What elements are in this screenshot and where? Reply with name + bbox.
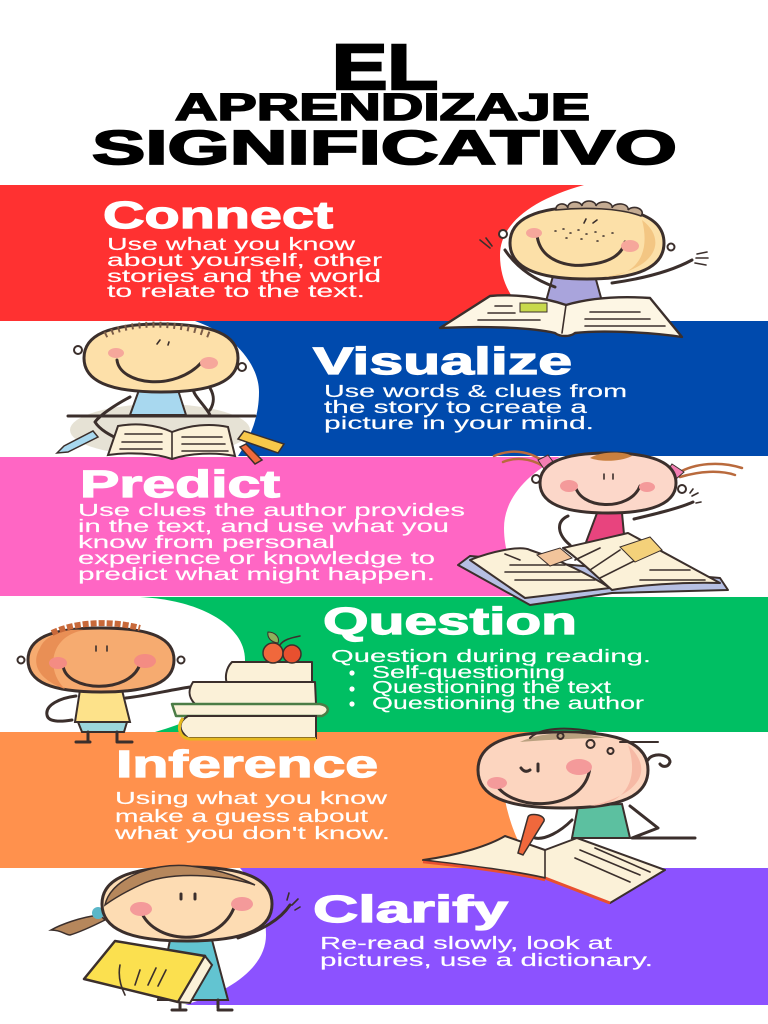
icon: boy writing, inference xyxy=(423,729,695,903)
panel: connect: Use what you know xyxy=(107,234,356,254)
panel: predict: Predict xyxy=(80,464,281,506)
panel: connect: Connect xyxy=(103,195,334,237)
panel: inference: make a guess about xyxy=(115,806,368,826)
panel: question: Question during reading. xyxy=(331,646,651,666)
panel: predict xyxy=(0,457,560,596)
icon: boy reading at table, visualize xyxy=(57,324,284,464)
title: APRENDIZAJE xyxy=(175,87,590,129)
bullet list: Questioning the text xyxy=(372,677,611,697)
panel: visualize xyxy=(195,321,768,456)
panel: visualize: picture in your mind. xyxy=(324,413,594,433)
panel: connect: about yourself, other xyxy=(107,250,382,270)
panel: inference: Using what you know xyxy=(115,788,388,808)
panel: inference xyxy=(0,732,570,868)
panel: connect: to relate to the text. xyxy=(107,281,365,301)
icon: girl reading, predict xyxy=(458,452,742,605)
panel: predict: experience or knowledge to xyxy=(78,548,435,568)
panel: visualize: the story to create a xyxy=(324,397,587,417)
panel: question xyxy=(140,597,768,732)
panel: inference: what you don't know. xyxy=(113,823,390,843)
panel: clarify: pictures, use a dictionary. xyxy=(320,950,653,970)
panel: predict: predict what might happen. xyxy=(78,564,435,584)
title xyxy=(92,31,677,175)
icon: boy reading, connect xyxy=(440,201,708,337)
panel: connect: stories and the world xyxy=(107,266,381,286)
icon: girl with yellow book, clarify xyxy=(51,865,300,1010)
panel: predict: in the text, and use what you xyxy=(78,516,449,536)
panel: clarify: Re-read slowly, look at xyxy=(320,933,612,953)
bullet list: Self-questioning xyxy=(372,662,565,682)
panel: predict: Use clues the author provides xyxy=(78,500,465,520)
icon: boy with book stack, question xyxy=(18,623,328,742)
title: SIGNIFICATIVO xyxy=(92,122,677,175)
bullet list: Questioning the author xyxy=(372,693,644,713)
title: EL xyxy=(332,31,438,103)
panel: visualize: Use words & clues from xyxy=(324,381,627,401)
panel: question: Question xyxy=(323,601,577,643)
panel: predict: know from personal xyxy=(78,532,335,552)
panel: clarify xyxy=(185,868,768,1005)
panel: clarify: Clarify xyxy=(313,889,508,931)
panel: visualize: Visualize xyxy=(313,341,572,383)
panel: connect xyxy=(0,185,584,321)
panel: inference: Inference xyxy=(116,744,378,786)
bullet list xyxy=(349,662,644,713)
